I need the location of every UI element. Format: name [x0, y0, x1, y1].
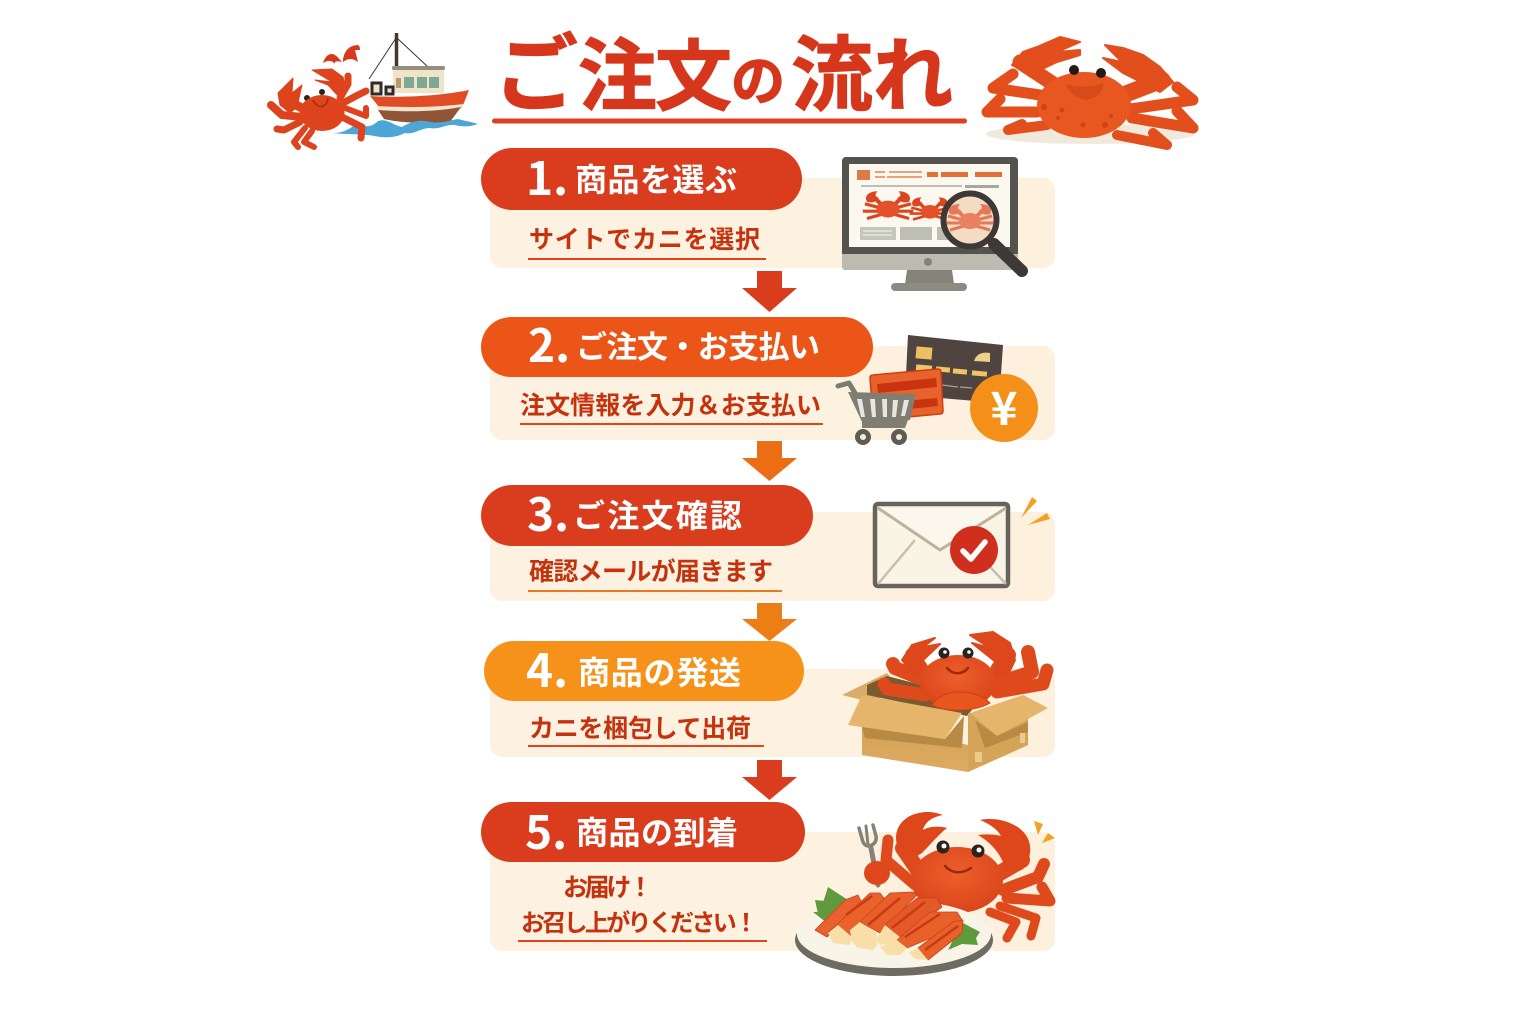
title: 文 [655, 35, 732, 121]
icon: sparkle marks [1034, 821, 1055, 843]
card background [490, 832, 1055, 951]
description underline [518, 940, 767, 942]
card background [490, 669, 1055, 757]
panel: step 5 [481, 797, 1055, 951]
crab [886, 812, 1050, 938]
leaves [813, 887, 848, 923]
title: ご [494, 28, 578, 122]
icon: sparkle marks [1021, 497, 1050, 525]
icon: crab in cardboard box [842, 632, 1048, 772]
heading pill [481, 317, 873, 377]
icon: fishing boat [369, 33, 469, 123]
crab hand [864, 861, 890, 885]
description: 確認メールが届きます [529, 552, 773, 588]
heading pill [481, 485, 813, 546]
icon: envelope with check [875, 497, 1050, 586]
icon: monitor with magnifying glass [842, 157, 1022, 291]
title: 流 [791, 31, 873, 122]
plate [795, 904, 993, 976]
description: 注文情報を入力＆お支払い [520, 386, 821, 422]
step number: 1. [526, 143, 568, 209]
icon: yen coin: ¥ [990, 373, 1018, 439]
heading text: 商品を選ぶ [575, 155, 737, 201]
icon: red credit card [870, 369, 943, 420]
icon: fork [859, 825, 878, 885]
card background [490, 178, 1055, 268]
crab leg pieces [815, 892, 963, 960]
panel: step 3 [481, 479, 1055, 601]
title underline [492, 118, 967, 124]
heading pill [481, 802, 805, 862]
panel: step 4 [484, 635, 1055, 757]
heading text: ご注文・お支払い [576, 322, 820, 367]
icon: cards, cart and yen coin [838, 335, 1038, 445]
arrow: step 3 to 4 [742, 603, 797, 641]
arrow: step 2 to 3 [742, 441, 797, 481]
icon: large crab top right [986, 37, 1194, 145]
icon: yen coin [970, 373, 1038, 442]
arrow: step 1 to 2 [742, 271, 797, 312]
icon: small crab [271, 45, 366, 147]
description underline [528, 745, 764, 747]
title: 注 [578, 32, 657, 121]
step number: 4. [526, 635, 568, 701]
description underline [520, 423, 823, 425]
step number: 3. [527, 479, 569, 545]
heading text: 商品の発送 [578, 648, 741, 694]
title: れ [873, 32, 953, 121]
heading pill [484, 641, 804, 701]
panel: step 1 [481, 143, 1055, 268]
description underline [528, 258, 766, 260]
icon: crab with fork and crab legs plate [795, 812, 1055, 976]
description: サイトでカニを選択 [529, 220, 760, 256]
description line 2: お召し上がりください！ [521, 903, 758, 938]
icon: waves [333, 119, 478, 137]
heading pill [481, 148, 802, 210]
title [494, 28, 953, 122]
icon: small crab with fishing boat [271, 33, 478, 147]
box back [842, 673, 905, 700]
crab [884, 632, 1047, 710]
icon: dark credit card [905, 335, 1003, 403]
card background [490, 512, 1055, 601]
title: の [731, 52, 785, 112]
description: カニを梱包して出荷 [529, 709, 751, 745]
heading text: ご注文確認 [573, 491, 742, 537]
heading text: 商品の到着 [576, 808, 738, 854]
arrow: step 4 to 5 [742, 760, 797, 800]
card background [490, 346, 1055, 440]
box front [862, 716, 1028, 772]
description underline [528, 590, 782, 592]
step number: 5. [525, 797, 567, 863]
step number: 2. [528, 310, 570, 376]
description line 1: お届け！ [563, 868, 653, 904]
icon: shopping cart [838, 383, 916, 445]
panel: step 2 [481, 310, 1055, 440]
